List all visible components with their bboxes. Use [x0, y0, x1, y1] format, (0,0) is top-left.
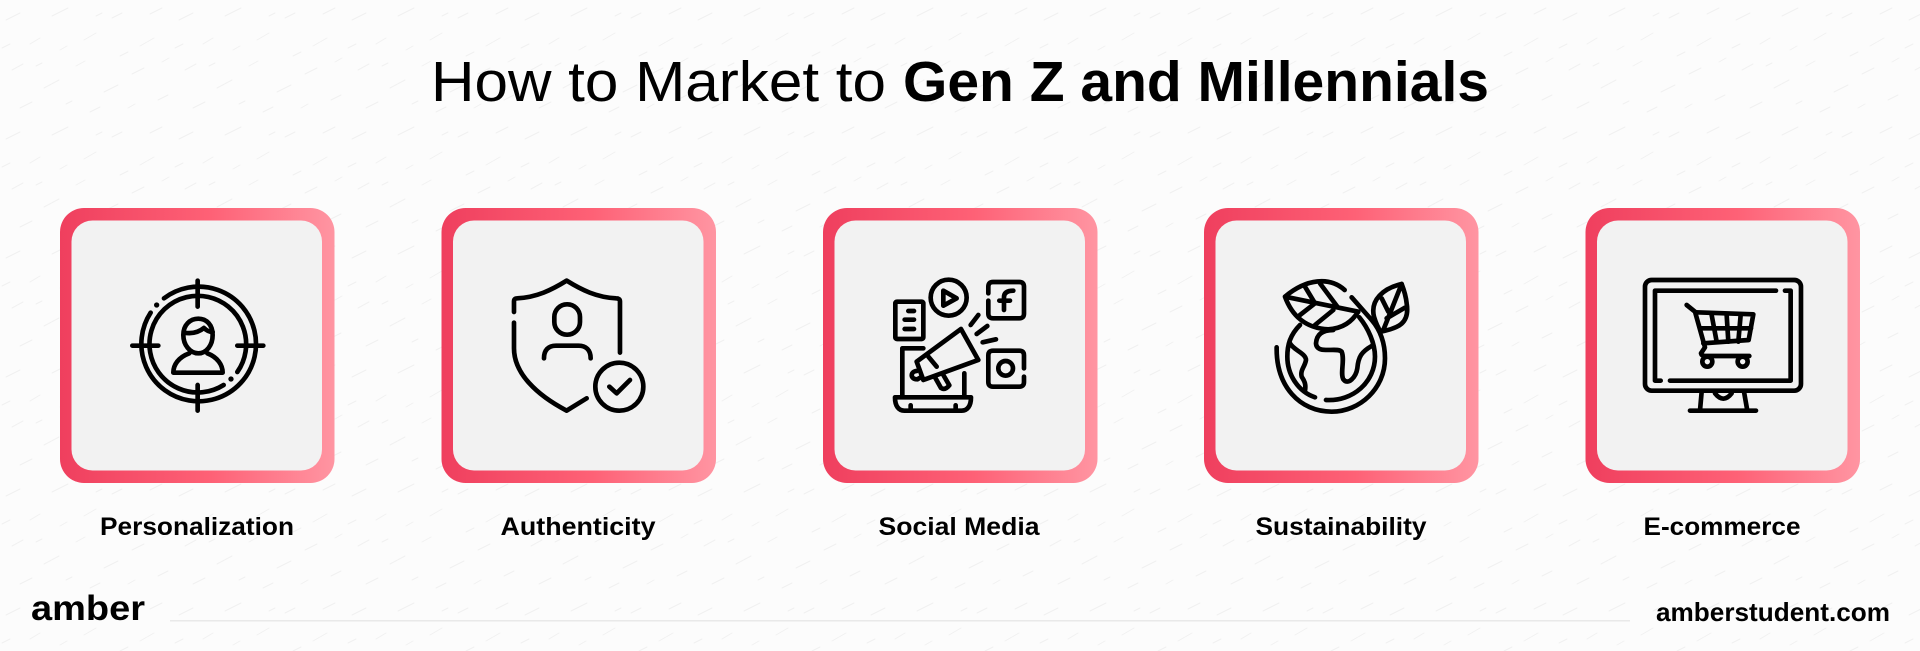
icon: target person: [132, 281, 263, 411]
card frame: [442, 208, 716, 483]
card frame: [1586, 208, 1860, 483]
panel: e-commerce: [1586, 208, 1860, 541]
footer rule: [170, 620, 1630, 622]
icon: megaphone and social media: [895, 280, 1024, 411]
card frame: [823, 208, 1098, 483]
label: Sustainability: [1256, 513, 1427, 541]
title: [431, 50, 1489, 114]
title: Gen Z and Millennials: [903, 50, 1489, 114]
title: How to Market to: [431, 50, 886, 114]
label: Personalization: [100, 513, 294, 541]
label: Authenticity: [500, 513, 656, 541]
label: E-commerce: [1644, 513, 1801, 541]
panel: social media: [823, 208, 1098, 541]
icon: shield with check: [514, 281, 643, 411]
panel: personalization: [60, 208, 334, 541]
panel: authenticity: [442, 208, 716, 541]
label: Social Media: [878, 513, 1041, 541]
panel: sustainability: [1204, 208, 1478, 541]
logo: amber: amber: [31, 589, 145, 628]
icon: monitor with shopping cart: [1645, 280, 1801, 411]
icon: globe with leaves: [1277, 281, 1407, 412]
card frame: [60, 208, 334, 483]
website url: amberstudent.com: [1656, 597, 1890, 627]
card frame: [1204, 208, 1478, 483]
